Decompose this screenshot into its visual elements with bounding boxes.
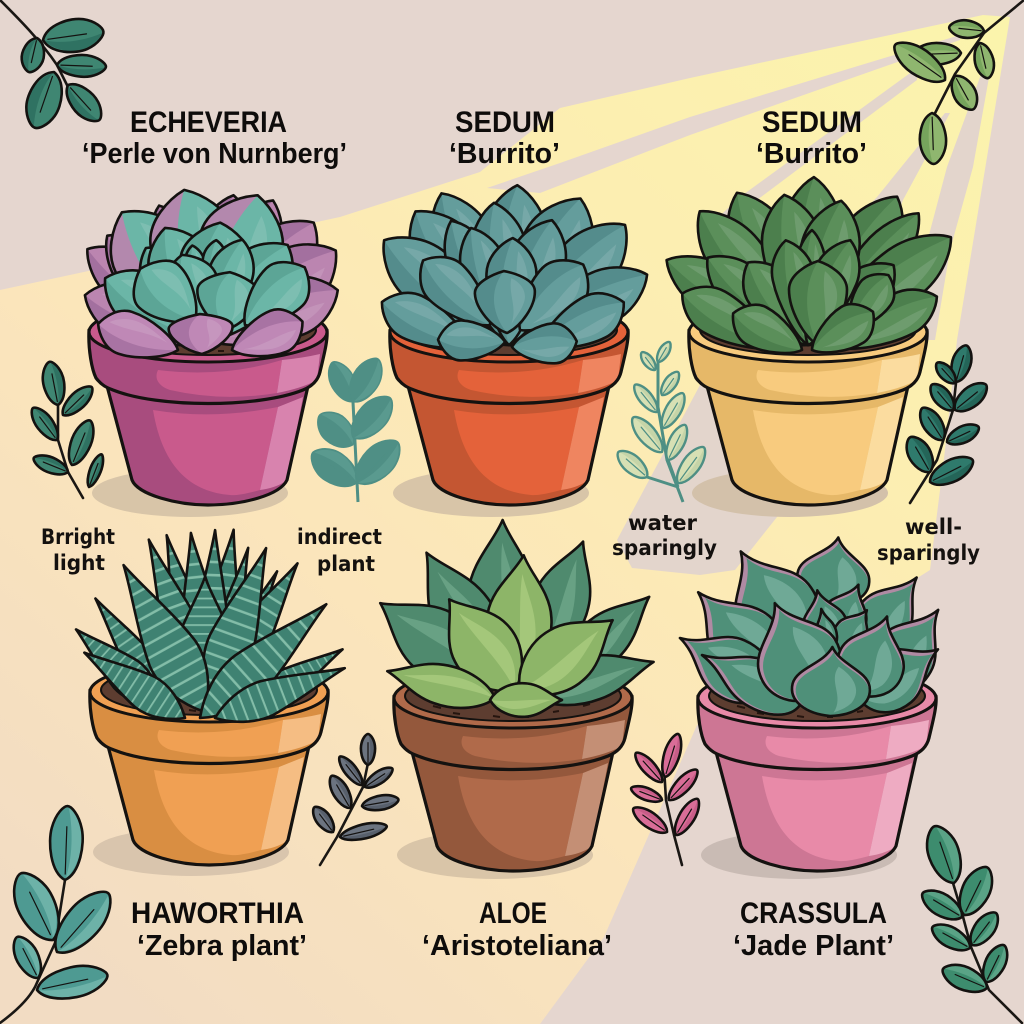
care label: water sparingly: sparingly <box>612 536 717 560</box>
plant: sedum in yellow pot <box>654 176 968 517</box>
title: Sedum Burrito (centre): SEDUM <box>455 106 555 139</box>
title: Haworthia Zebra plant <box>131 897 307 962</box>
title: Crassula Jade Plant: ‘Jade Plant’ <box>733 930 894 962</box>
care label: well-sparingly <box>877 515 980 565</box>
sprig: flat teal between magenta and orange pots <box>303 352 409 502</box>
title: Echeveria Perle von Nurnberg <box>82 106 347 170</box>
sprig: pale outline between orange and yellow pots <box>613 340 711 502</box>
plant: sedum in orange-red pot <box>365 181 659 517</box>
sprig: left of magenta pot <box>26 360 107 498</box>
title: Sedum Burrito (right) <box>756 106 867 170</box>
care label: bright light: Brright <box>41 525 115 549</box>
title: Aloe Aristoteliana: ALOE <box>479 897 547 930</box>
title: Haworthia Zebra plant: HAWORTHIA <box>131 897 304 930</box>
branch: bottom left <box>0 805 121 1023</box>
care label: well-sparingly: well- <box>905 515 962 539</box>
title: Crassula Jade Plant <box>733 897 894 962</box>
care label: indirect plant: plant <box>317 552 375 576</box>
plant: aloe in brown pot <box>361 519 665 879</box>
title: Haworthia Zebra plant: ‘Zebra plant’ <box>137 930 307 962</box>
care label: indirect plant: indirect <box>297 525 382 549</box>
title: Sedum Burrito (centre) <box>449 106 560 170</box>
branch: bottom right <box>917 821 1022 1023</box>
sprig: right of yellow pot <box>901 343 992 503</box>
care label: water sparingly: water <box>628 511 698 535</box>
care label: bright light: light <box>53 551 105 575</box>
title: Aloe Aristoteliana: ‘Aristoteliana’ <box>422 930 612 962</box>
care label: water sparingly <box>612 511 717 560</box>
plant: echeveria in magenta pot <box>72 182 354 517</box>
title: Sedum Burrito (right): SEDUM <box>762 106 862 139</box>
title: Echeveria Perle von Nurnberg: ‘Perle von Nurnberg’ <box>82 138 347 170</box>
plant: crassula in pink pot <box>665 530 963 879</box>
title: Echeveria Perle von Nurnberg: ECHEVERIA <box>130 106 287 139</box>
branch: top right <box>888 0 1024 164</box>
title: Aloe Aristoteliana <box>422 897 612 962</box>
care label: well-sparingly: sparingly <box>877 541 980 565</box>
care label: indirect plant <box>297 525 382 576</box>
care label: bright light <box>41 525 115 575</box>
sprig: grey leaves <box>309 734 400 865</box>
title: Crassula Jade Plant: CRASSULA <box>740 897 887 930</box>
plant: haworthia in orange pot <box>64 527 351 876</box>
title: Sedum Burrito (centre): ‘Burrito’ <box>449 138 560 170</box>
title: Sedum Burrito (right): ‘Burrito’ <box>756 138 867 170</box>
branch: top left <box>0 0 108 133</box>
sprig: pink leaves <box>629 732 704 865</box>
